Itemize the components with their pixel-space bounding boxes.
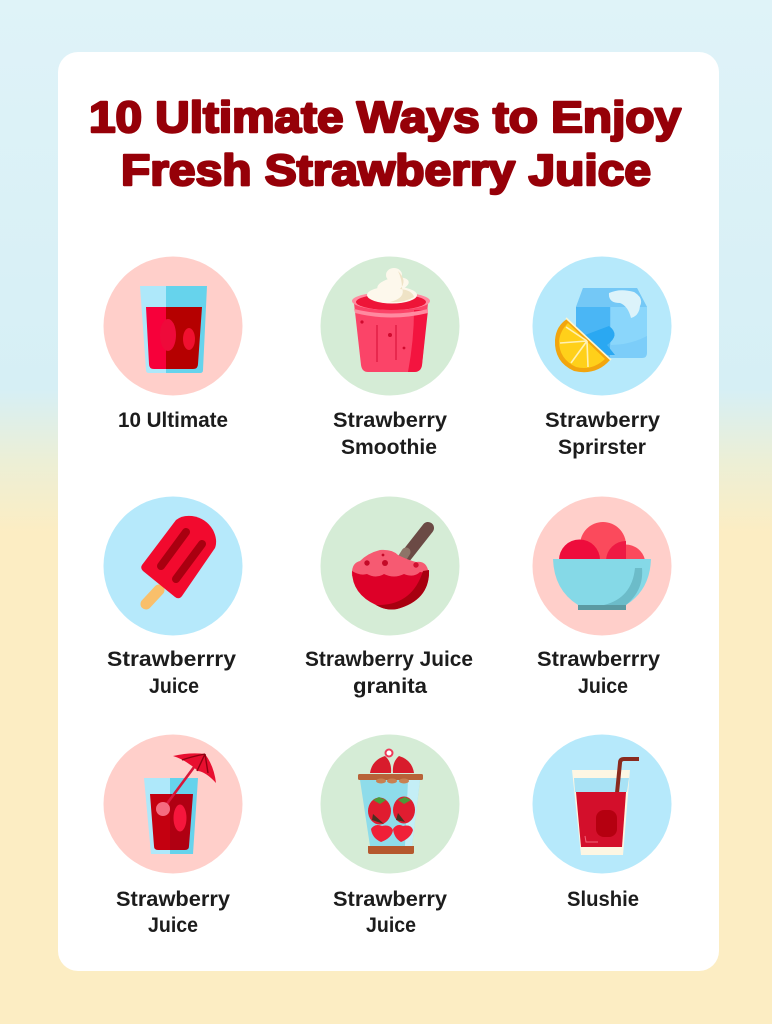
icon: bowl of granita with spoon xyxy=(320,496,460,636)
item: 10 Ultimate xyxy=(104,256,242,432)
icon: bowl of scoops xyxy=(532,496,672,636)
item: Strawberry Juice (popsicle): Juice xyxy=(149,675,199,698)
icon: smoothie cup with cream xyxy=(320,256,460,396)
item: Strawberrry Juice (bowl) xyxy=(532,496,672,698)
label: Slushie xyxy=(567,888,639,911)
label: Strawberry xyxy=(116,888,230,911)
label: Strawberrry xyxy=(537,648,660,671)
label: Strawberry xyxy=(545,409,660,432)
item: Strawberry Juice (blender): Juice xyxy=(366,914,416,937)
label: Strawberry Juice xyxy=(305,648,473,671)
item: Strawberry Juice (umbrella drink): Juice xyxy=(148,914,198,937)
panel: white card xyxy=(58,52,719,971)
icon: popsicle xyxy=(104,496,242,636)
item: Strawberry Juice (umbrella drink) xyxy=(104,734,242,937)
icon: glass with cocktail umbrella xyxy=(104,734,242,874)
item: Strawberry Juice granita: granita xyxy=(353,675,427,698)
label: Strawberrry xyxy=(107,648,236,671)
item: Strawberry Juice (popsicle) xyxy=(104,496,242,698)
item: Strawberry Sprirster: Sprirster xyxy=(558,436,646,459)
item: Strawberrry Juice (bowl): Juice xyxy=(578,675,628,698)
icon: glass with straw xyxy=(532,734,672,874)
title xyxy=(89,93,682,195)
label: Strawberry xyxy=(333,409,447,432)
title: 10 Ultimate Ways to Enjoy xyxy=(89,93,682,142)
item: Strawberry Sprirster xyxy=(532,256,672,459)
item: Strawberry Smoothie xyxy=(320,256,460,459)
icon: blender jar with strawberries xyxy=(320,734,460,874)
icon: glass of juice xyxy=(104,256,242,396)
item: Strawberry Juice granita xyxy=(305,496,473,698)
label: Strawberry xyxy=(333,888,447,911)
item: Slushie xyxy=(532,734,672,911)
label: 10 Ultimate xyxy=(118,409,228,432)
item: Strawberry Smoothie: Smoothie xyxy=(341,436,437,459)
title: Fresh Strawberry Juice xyxy=(121,146,651,195)
icon: ice cube and lemon xyxy=(532,256,672,396)
item: Strawberry Juice (blender) xyxy=(320,734,460,937)
